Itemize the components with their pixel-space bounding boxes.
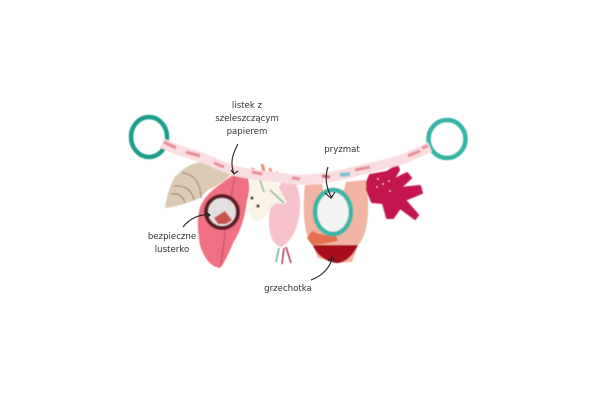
- mirror: [206, 196, 238, 228]
- prism ring: [315, 190, 351, 234]
- label: bezpieczne lusterko: [148, 232, 196, 255]
- label: listek z szeleszczącym papierem: [215, 101, 279, 137]
- arrow: to paper leaf: [231, 144, 238, 174]
- feather toy: [269, 179, 300, 264]
- icon: left teal ring: [131, 117, 167, 157]
- label: listek z szeleszczącym papierem: listek z: [232, 101, 263, 111]
- llama head: [248, 164, 287, 221]
- label: pryzmat: pryzmat: [324, 145, 360, 155]
- label: grzechotka: grzechotka: [264, 284, 312, 294]
- pink leaf with mirror: [198, 174, 249, 268]
- fabric ribbon: [162, 142, 430, 180]
- arrow: to mirror: [183, 212, 210, 227]
- arrow: to rattle: [311, 257, 335, 280]
- label: listek z szeleszczącym papierem: szeleszczącym: [215, 114, 279, 124]
- icon: right teal ring: [428, 120, 466, 158]
- red hand shaped leaf: [367, 165, 422, 219]
- red rattle base: [313, 245, 358, 263]
- beige leaf: [165, 162, 232, 208]
- label: listek z szeleszczącym papierem: papierem: [227, 127, 267, 137]
- label: bezpieczne lusterko: bezpieczne: [148, 232, 196, 242]
- arrow: to prism: [325, 167, 335, 198]
- label: bezpieczne lusterko: lusterko: [155, 245, 189, 255]
- peach leaf with prism: [304, 180, 368, 263]
